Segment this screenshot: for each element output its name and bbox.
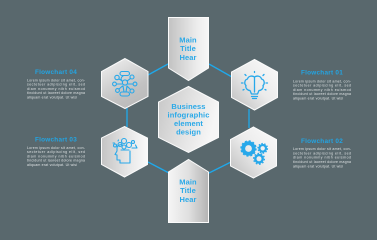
hexagon 04 with network icon (102, 58, 148, 108)
icon: network (113, 72, 137, 96)
center hexagon: Business infographic element design: design (176, 128, 201, 137)
text block: Flowchart 03: Lorem ipsum dolor sit amet, con- (27, 146, 86, 150)
text block: Flowchart 03: aliquam erat volutpat. Ut wisi (27, 163, 77, 167)
text block: Flowchart 01: tincidunt ut laoreet dolore magna (293, 92, 351, 96)
connector lines (127, 64, 249, 173)
text block: Flowchart 02: sectetuer adipiscing elit, sed (293, 151, 351, 155)
text block: Flowchart 04: sectetuer adipiscing elit, sed (27, 83, 85, 87)
text block: Flowchart 03 (27, 136, 86, 167)
center hexagon: Business infographic element design: infographic (168, 111, 209, 120)
top banner: Main Title Hear (168, 18, 208, 80)
text block: Flowchart 01: diam nonummy nibh euismod (293, 88, 351, 92)
text block: Flowchart 01 (293, 70, 352, 100)
bottom banner: Main Title Hear: Hear (179, 195, 197, 204)
hexagon 03 with head icon (102, 126, 148, 177)
text block: Flowchart 01: Flowchart 01 (301, 70, 343, 76)
center hexagon: Business infographic element design: Business (171, 102, 206, 111)
text block: Flowchart 03: Flowchart 03 (35, 136, 77, 144)
text block: Flowchart 04: diam nonummy nibh euismod (27, 87, 85, 91)
icon: head with ideas (113, 138, 137, 163)
top banner: Main Title Hear: Main (179, 36, 197, 44)
text block: Flowchart 03: tincidunt ut laoreet dolore magna (27, 159, 85, 163)
text block: Flowchart 01: aliquam erat volutpat. Ut wisi (293, 96, 343, 100)
text block: Flowchart 02 (293, 138, 352, 168)
bottom banner: Main Title Hear: Main (179, 178, 197, 186)
hexagon 02 with gears icon (230, 127, 276, 178)
text block: Flowchart 04 (27, 69, 86, 100)
text block: Flowchart 02: Flowchart 02 (301, 138, 343, 145)
text block: Flowchart 03: sectetuer adipiscing elit, sed (27, 150, 85, 154)
text block: Flowchart 04: Lorem ipsum dolor sit amet, con- (27, 78, 86, 82)
text block: Flowchart 01: Lorem ipsum dolor sit amet, con- (293, 79, 352, 83)
text block: Flowchart 02: tincidunt ut laoreet dolore magna (293, 160, 351, 164)
text block: Flowchart 04: Flowchart 04 (35, 69, 77, 76)
icon: gears (241, 141, 268, 164)
text block: Flowchart 04: tincidunt ut laoreet dolore magna (27, 91, 85, 95)
hexagon 01 with lightbulb icon (232, 60, 278, 110)
bottom banner: Main Title Hear: Title (180, 186, 196, 195)
text block: Flowchart 03: diam nonummy nibh euismod (27, 154, 85, 158)
bottom banner: Main Title Hear (168, 160, 208, 222)
top banner: Main Title Hear: Title (180, 44, 196, 53)
text block: Flowchart 02: aliquam erat volutpat. Ut wisi (293, 164, 343, 168)
text block: Flowchart 01: sectetuer adipiscing elit, sed (293, 84, 351, 88)
text block: Flowchart 04: aliquam erat volutpat. Ut wisi (27, 96, 77, 100)
text block: Flowchart 02: diam nonummy nibh euismod (293, 156, 351, 160)
top banner: Main Title Hear: Hear (179, 53, 197, 62)
center hexagon: Business infographic element design: element (174, 119, 203, 128)
icon: lightbulb brain (242, 72, 268, 98)
text block: Flowchart 02: Lorem ipsum dolor sit amet, con- (293, 147, 352, 151)
center hexagon: Business infographic element design (158, 86, 218, 152)
